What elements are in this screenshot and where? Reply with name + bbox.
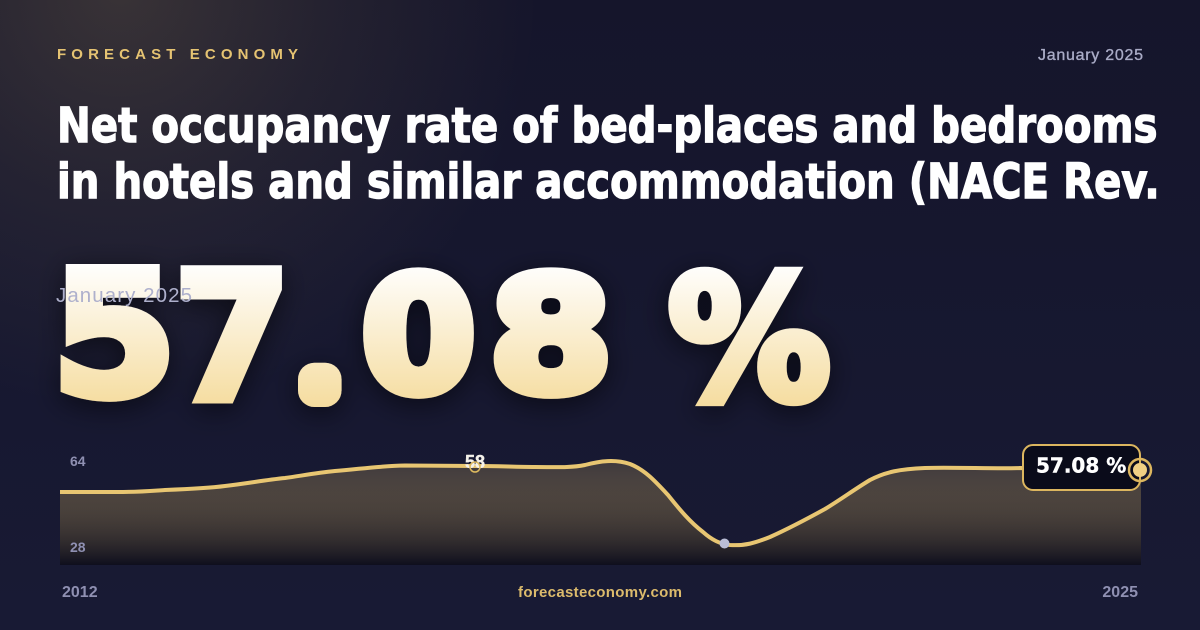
area chart (60, 461, 1141, 565)
chart area (60, 461, 1141, 565)
title: Net occupancy rate of bed-places and bedrooms (57, 99, 1157, 154)
x label: 2012: 2012 (62, 584, 98, 601)
big value: . (308, 335, 331, 405)
website: forecasteconomy.com (518, 584, 682, 601)
big value (52, 236, 831, 441)
big value: 8 (490, 245, 612, 428)
chart line (60, 461, 1141, 545)
latest value callout: 57.08 % (1036, 454, 1126, 478)
big value: % (668, 241, 831, 440)
big value: 7 (174, 237, 290, 441)
big value: 5 (52, 236, 176, 436)
low point marker (720, 538, 730, 548)
date overlay: January 2025 (56, 284, 192, 307)
axis label: 64: 64 (70, 453, 86, 469)
title: in hotels and similar accommodation (NACE Rev. (57, 155, 1160, 210)
brand name: FORECAST ECONOMY (57, 46, 298, 63)
annotation: 58: 58 (465, 452, 485, 472)
x label: 2025: 2025 (1102, 584, 1138, 601)
axis label: 28: 28 (70, 539, 86, 555)
title (57, 99, 1160, 210)
latest value callout (1023, 445, 1151, 490)
date top right: January 2025 (1038, 47, 1143, 64)
big value: 0 (361, 244, 475, 428)
